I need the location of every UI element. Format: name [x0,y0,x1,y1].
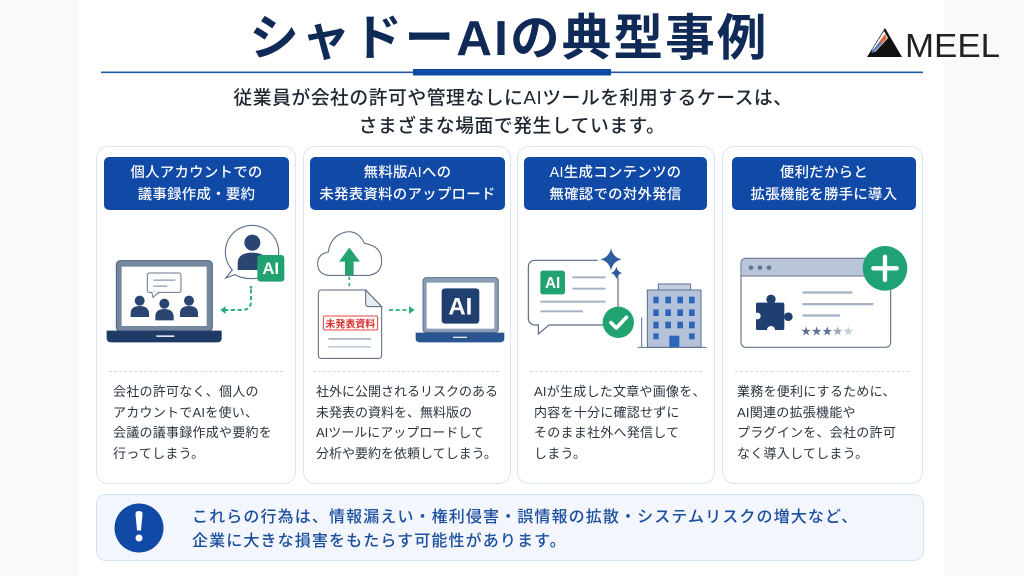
rating stars: ★ [800,323,812,338]
subtitle: 従業員が会社の許可や管理なしにAIツールを利用するケースは、 [233,87,793,108]
panel: card 3 frame [517,146,715,484]
panel: card 4 frame [722,146,923,484]
card 1 heading: 議事録作成・要約 [138,187,255,203]
card 2 text [316,384,498,461]
card 2 text: AIツールにアップロードして [316,425,484,440]
card 2 text: 分析や要約を依頼してしまう。 [316,446,497,461]
card 4 heading: 拡張機能を勝手に導入 [751,187,897,203]
AI badge: AI [262,259,279,278]
icon: puzzle piece [754,295,793,334]
rating stars: ★ [811,323,822,338]
AI badge [257,255,284,282]
rating stars [800,323,854,338]
panel: warning note [96,494,924,561]
card 4 heading: 便利だからと [780,165,868,181]
card 1 text: 会社の許可なく、個人の [113,384,259,399]
rating stars: ★ [832,323,843,338]
card 4 text: 業務を便利にするために、 [737,384,896,399]
subtitle: さまざまな場面で発生しています。 [359,115,665,136]
card 3 heading: 無確認での対外発信 [549,187,682,203]
speech bubble with person [225,225,279,279]
card 2 heading: 無料版AIへの [364,165,451,181]
card 2 heading [310,157,505,210]
panel: card 2 frame [303,146,511,484]
panel: card 1 frame [96,146,296,484]
dashed arrow to laptop [389,306,415,314]
icon: laptop with AI: AI [448,294,472,321]
dashed arrow [220,286,252,314]
sparkles [600,248,622,279]
laptop [107,261,222,342]
speech bubble [528,260,618,334]
card 1 text: アカウントでAIを使い、 [113,405,258,420]
icon: AI content bubble and building [528,246,907,347]
plus badge [863,246,907,291]
warning text [192,508,858,550]
card 1 heading [104,157,289,210]
card 3 text: 内容を十分に確認せずに [534,405,680,420]
building [638,284,707,347]
card 3 heading [524,157,707,210]
card 3 text: AIが生成した文章や画像を、 [534,384,706,399]
title rule [101,69,923,76]
card 2 heading: 未発表資料のアップロード [319,187,496,203]
warning text: これらの行為は、情報漏えい・権利侵害・誤情報の拡散・システムリスクの増大など、 [192,509,858,526]
card 4 text [737,384,896,461]
card 3 text: しまう。 [534,446,586,461]
card 3 text: そのまま社外へ発信して [534,425,679,440]
icon: unpublished document [318,290,382,358]
card 4 heading [732,157,916,210]
rating stars: ★ [822,323,833,338]
icon: cloud upload [318,232,382,290]
card 1 text [113,384,272,461]
card 3 heading: AI生成コンテンツの [550,165,681,181]
card 1 text: 行ってしまう。 [113,446,204,461]
card 4 text: AI関連の拡張機能や [737,405,856,420]
card 2 text: 未発表の資料を、無料版の [316,405,472,420]
card 3 text [534,384,706,461]
warning text: 企業に大きな損害をもたらす可能性があります。 [192,532,567,550]
card 1 heading: 個人アカウントでの [130,165,263,181]
speech bubble: AI [545,275,560,292]
icon: laptop meeting with AI bubble [107,225,504,358]
icon: laptop with AI [416,278,504,342]
card 4 text: プラグインを、会社の許可 [737,425,896,440]
icon: unpublished document: 未発表資料 [325,315,375,330]
title: シャドーAIの典型事例 [249,11,769,66]
check badge [603,307,634,338]
logo: MEEL [905,27,1000,64]
icon: browser window [741,258,891,347]
card 4 text: なく導入してしまう。 [737,446,868,461]
rating stars: ★ [843,323,854,338]
card 2 text: 社外に公開されるリスクのある [316,384,498,399]
logo [867,27,1000,64]
card 1 text: 会議の議事録作成や要約を [113,425,272,440]
subtitle [233,87,793,136]
